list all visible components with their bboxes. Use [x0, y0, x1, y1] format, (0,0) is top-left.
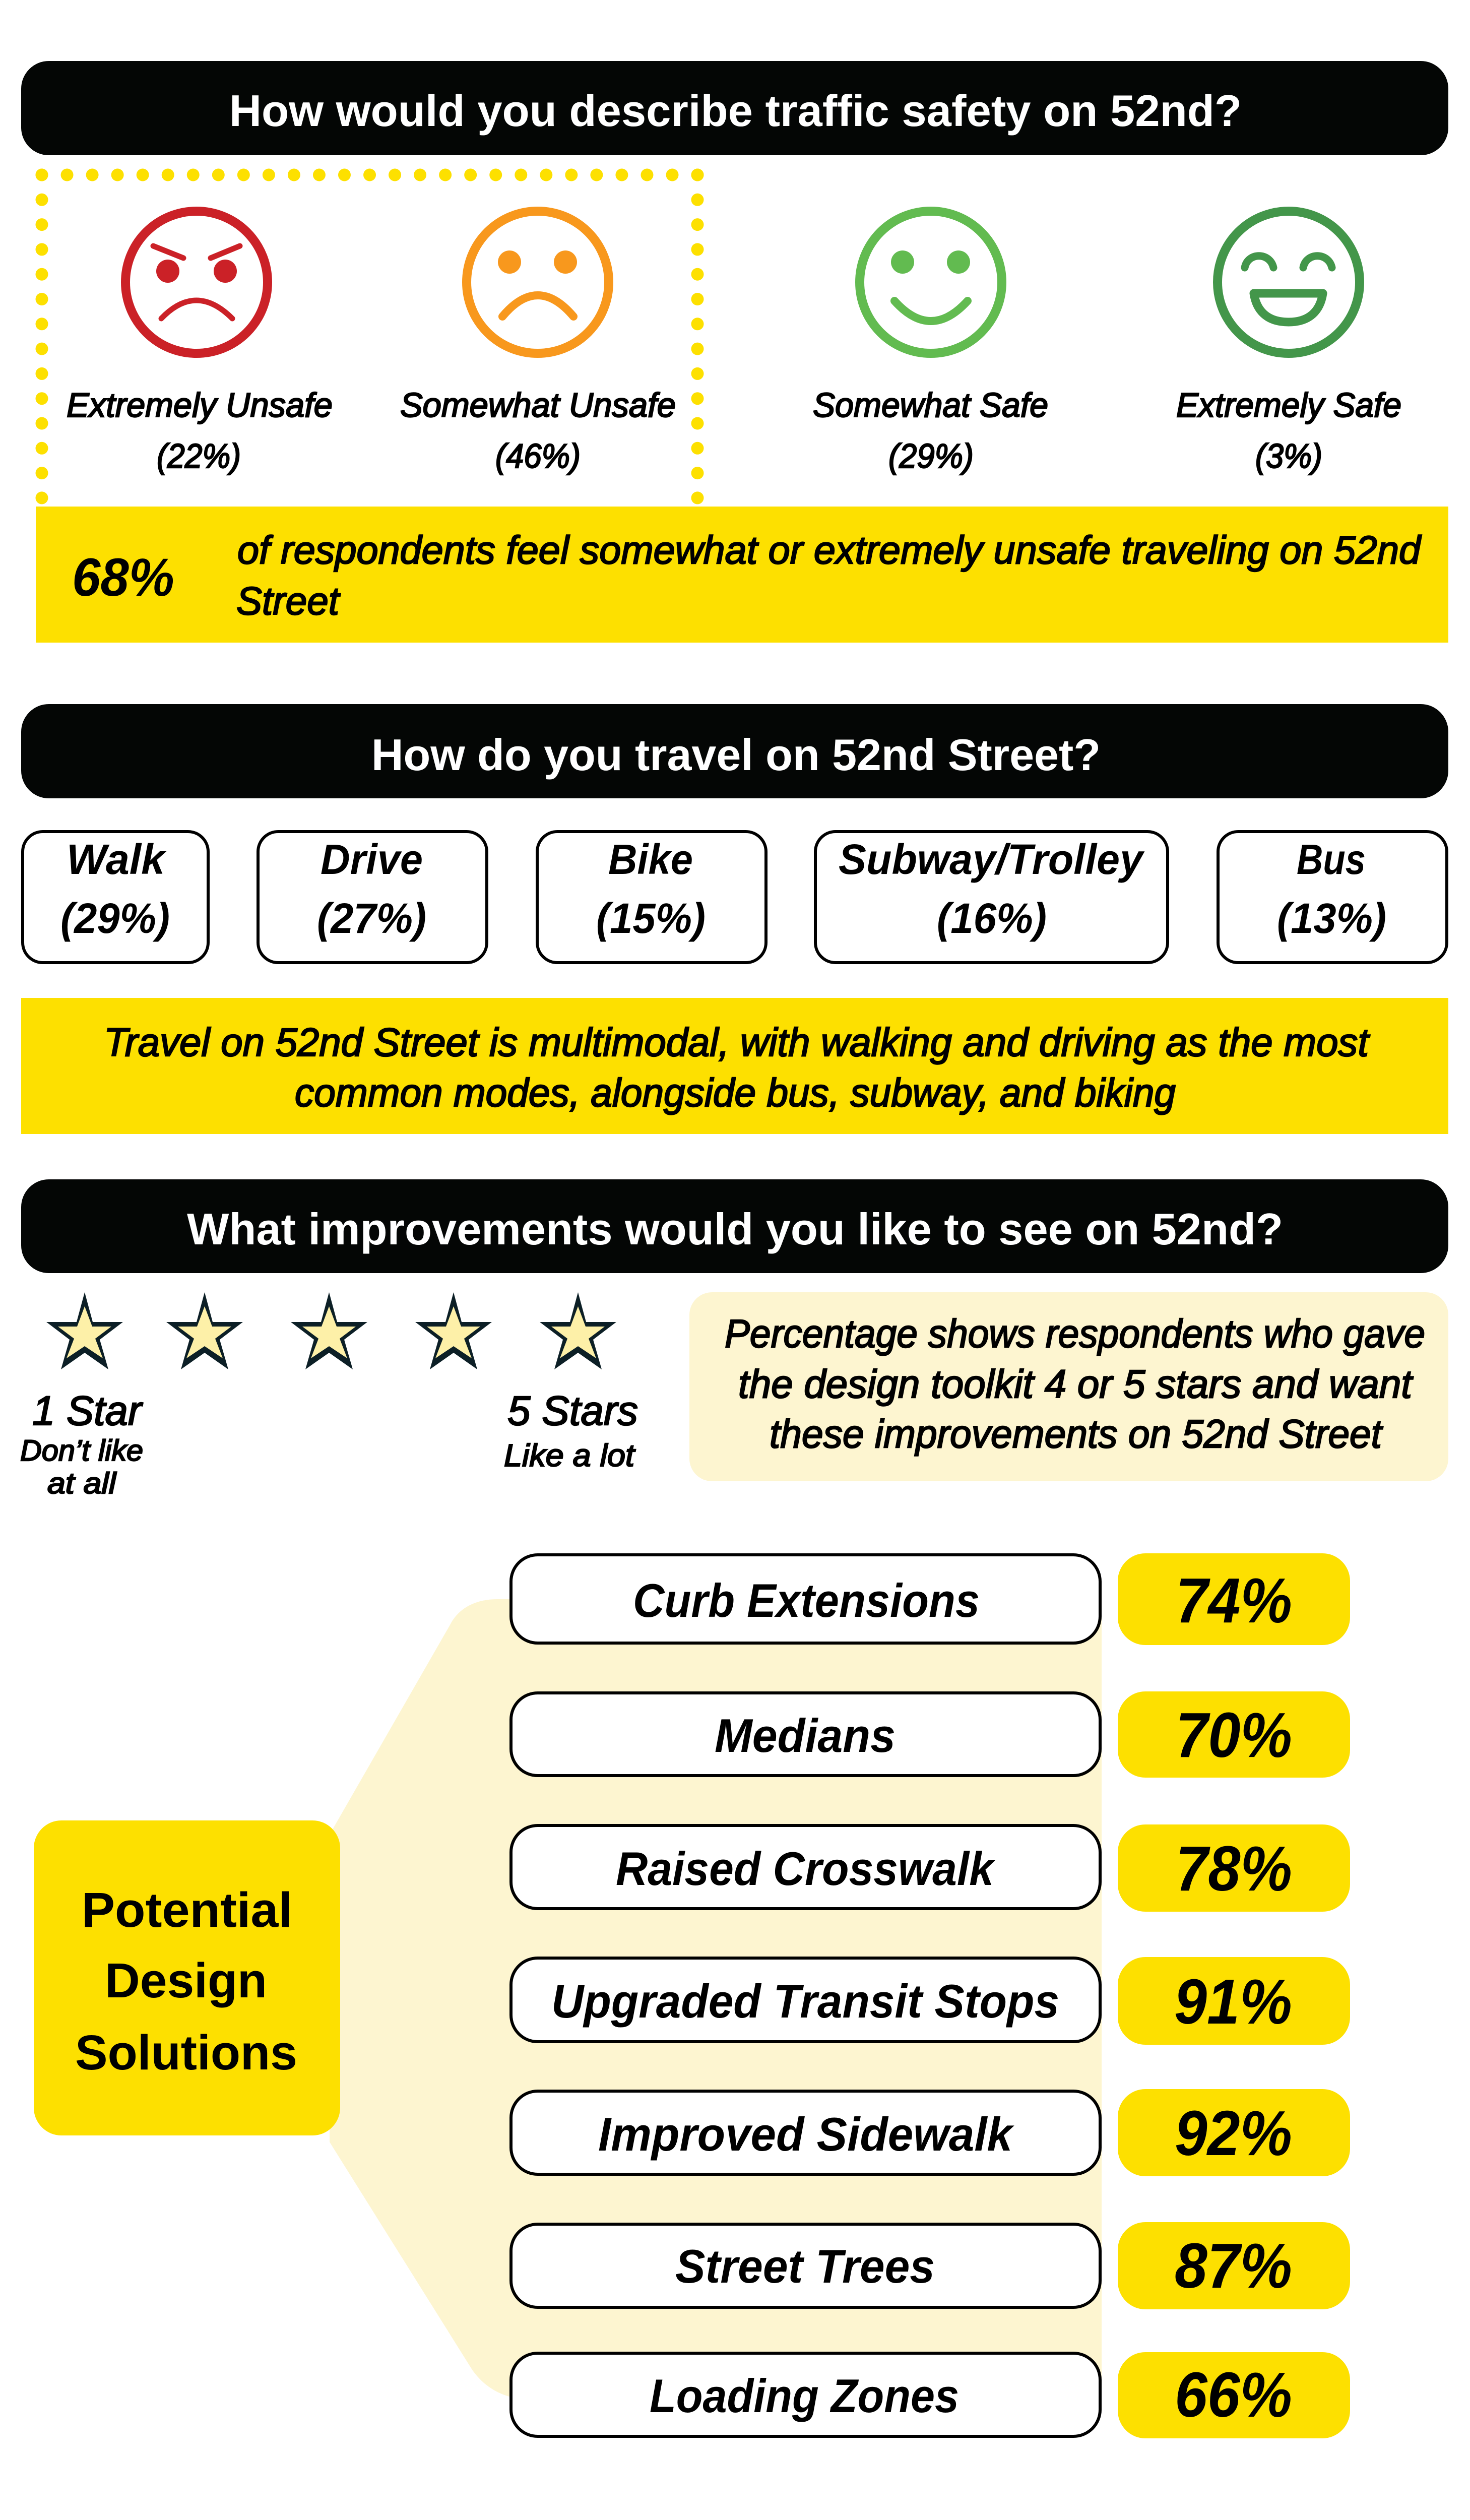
icon: laughing face	[1218, 211, 1360, 353]
label: 5 stars: Like a lot	[504, 1438, 636, 1473]
box: potential design solutions: Design	[105, 1953, 267, 2008]
mode: walk	[23, 832, 208, 963]
mode: bike: Bike	[608, 836, 693, 883]
label: 5 stars	[504, 1388, 638, 1473]
icon: star 3	[291, 1292, 367, 1369]
row: loading zones: 66%	[1175, 2359, 1292, 2430]
label: 1 star: 1 Star	[32, 1388, 144, 1434]
mode: subway or trolley: (16%)	[937, 895, 1047, 942]
callout: 68 percent unsafe: 68%	[72, 547, 174, 607]
callout: 68 percent unsafe	[36, 507, 1448, 643]
box: potential design solutions: Potential	[82, 1882, 292, 1937]
label: somewhat unsafe	[400, 386, 676, 475]
mode: bus	[1218, 832, 1447, 963]
heading: travel question: How do you travel on 52nd Street?	[371, 730, 1101, 780]
row: street trees: 87%	[1175, 2230, 1292, 2301]
row: improved sidewalk	[511, 2089, 1350, 2176]
icon: smiling face	[860, 211, 1002, 353]
mode: bike	[537, 832, 766, 963]
label: somewhat safe	[813, 386, 1048, 475]
row: medians: Medians	[715, 1709, 896, 1762]
mode: bus: Bus	[1297, 836, 1366, 883]
row: curb extensions: Curb Extensions	[633, 1574, 980, 1627]
mode: drive: (27%)	[317, 895, 426, 942]
row: medians	[511, 1691, 1350, 1778]
row: raised crosswalk: Raised Crosswalk	[616, 1842, 996, 1895]
row: upgraded transit stops: Upgraded Transit Stops	[551, 1975, 1059, 2028]
label: extremely unsafe	[67, 386, 333, 475]
icon: star 5	[540, 1292, 616, 1369]
label: somewhat unsafe: (46%)	[495, 437, 581, 475]
icon: sad face	[467, 211, 609, 353]
heading: improvements question	[21, 1179, 1448, 1273]
label: extremely safe	[1176, 386, 1401, 475]
row: upgraded transit stops	[511, 1957, 1350, 2045]
box: potential design solutions: Solutions	[75, 2025, 297, 2080]
label: somewhat unsafe: Somewhat Unsafe	[400, 386, 676, 424]
row: loading zones	[511, 2352, 1350, 2438]
mode: walk: (29%)	[60, 895, 170, 942]
icon: star 1	[46, 1292, 123, 1369]
label: extremely safe: Extremely Safe	[1176, 386, 1401, 424]
row: upgraded transit stops: 91%	[1174, 1966, 1292, 2037]
mode: drive	[258, 832, 487, 963]
label: 1 star: at all	[47, 1467, 117, 1500]
heading: improvements question: What improvements would you like to see on 52nd?	[187, 1204, 1283, 1254]
callout: 68 percent unsafe: Street	[236, 579, 341, 623]
box: potential design solutions	[34, 1820, 340, 2135]
heading: traffic safety question: How would you describe traffic safety on 52nd?	[229, 86, 1242, 136]
icon: angry face	[125, 211, 268, 353]
mode: bus: (13%)	[1277, 895, 1386, 942]
panel: desired improvements	[20, 1179, 1448, 2438]
mode: walk: Walk	[67, 836, 167, 883]
mode: bike: (15%)	[596, 895, 706, 942]
callout: multimodal travel: common modes, alongside bus, subway, and biking	[295, 1070, 1176, 1115]
row: curb extensions	[511, 1553, 1350, 1645]
connector: cream funnel	[330, 1599, 1102, 2397]
label: 1 star	[20, 1388, 144, 1500]
row: curb extensions: 74%	[1176, 1565, 1292, 1636]
row: medians: 70%	[1176, 1699, 1292, 1771]
row: street trees	[511, 2222, 1350, 2309]
mode: subway or trolley: Subway/Trolley	[839, 836, 1145, 883]
label: somewhat safe: (29%)	[888, 437, 974, 475]
note: percentage explanation: the design toolkit 4 or 5 stars and want	[738, 1361, 1414, 1406]
note: percentage explanation: Percentage shows respondents who gave	[725, 1311, 1425, 1356]
label: extremely unsafe: (22%)	[157, 437, 241, 475]
label: extremely unsafe: Extremely Unsafe	[67, 386, 333, 424]
icon: star 2	[166, 1292, 243, 1369]
panel: travel modes	[21, 704, 1448, 1134]
row: street trees: Street Trees	[675, 2240, 935, 2293]
mode: drive: Drive	[321, 836, 423, 883]
label: 5 stars: 5 Stars	[507, 1388, 638, 1434]
heading: traffic safety question	[21, 61, 1448, 155]
callout: multimodal travel: Travel on 52nd Street is multimodal, with walking and driving as the most	[104, 1020, 1370, 1064]
label: 1 star: Don’t like	[20, 1434, 143, 1467]
heading: travel question	[21, 704, 1448, 798]
row: improved sidewalk: Improved Sidewalk	[598, 2108, 1015, 2161]
row: raised crosswalk: 78%	[1176, 1833, 1292, 1904]
callout: multimodal travel	[21, 998, 1448, 1134]
note: percentage explanation	[689, 1292, 1448, 1481]
row: raised crosswalk	[511, 1824, 1350, 1912]
mode: subway or trolley	[815, 832, 1168, 963]
star rating scale	[46, 1292, 616, 1369]
dotted outline around unsafe responses	[42, 175, 698, 499]
panel: traffic safety	[21, 61, 1448, 643]
row: loading zones: Loading Zones	[650, 2369, 959, 2422]
label: somewhat safe: Somewhat Safe	[813, 386, 1048, 424]
icon: star 4	[415, 1292, 492, 1369]
callout: 68 percent unsafe: of respondents feel somewhat or extremely unsafe traveling on 52nd	[237, 528, 1422, 572]
label: extremely safe: (3%)	[1255, 437, 1322, 475]
row: improved sidewalk: 92%	[1175, 2098, 1292, 2169]
note: percentage explanation: these improvements on 52nd Street	[770, 1411, 1383, 1456]
